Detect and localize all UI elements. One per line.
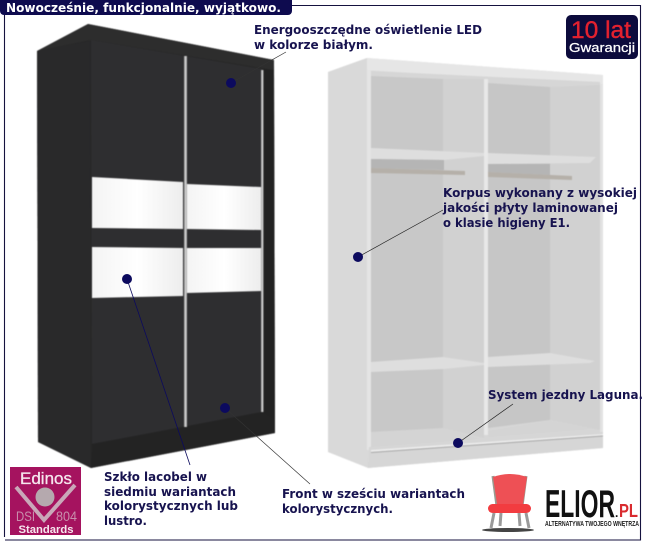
upper shelves and hanging rods bbox=[371, 148, 596, 180]
callout: front bbox=[220, 403, 465, 516]
glass bands bbox=[92, 177, 261, 298]
logo: ELIOR.PL with red chair: PL bbox=[619, 501, 638, 521]
callout: running system bbox=[453, 388, 643, 448]
lower shelves bbox=[371, 353, 595, 372]
logo: Edinos DSI 804 Standards: Edinos bbox=[20, 469, 72, 488]
logo: Edinos DSI 804 Standards: Standards bbox=[18, 524, 74, 536]
callout: running system: System jezdny Laguna. bbox=[488, 388, 643, 402]
callout: LED lighting: Energooszczędne oświetlenie LED bbox=[254, 23, 482, 37]
callout: front: kolorystycznych. bbox=[282, 502, 393, 516]
callout: lacobel glass: lustro. bbox=[104, 514, 147, 528]
callout: lacobel glass: Szkło lacobel w bbox=[104, 470, 207, 484]
logo: ELIOR.PL with red chair bbox=[482, 474, 639, 532]
title banner: Nowocześnie, funkcjonalnie, wyjątkowo. bbox=[6, 0, 281, 15]
callout: carcass bbox=[353, 186, 637, 262]
base and sliding track bbox=[368, 421, 603, 468]
callout: front: Front w sześciu wariantach bbox=[282, 487, 465, 501]
badge: 10 year warranty: Gwarancji bbox=[569, 41, 635, 55]
badge: 10 year warranty bbox=[566, 15, 638, 59]
callout: carcass: Korpus wykonany z wysokiej bbox=[443, 186, 637, 200]
logo: Edinos DSI 804 Standards: DSI bbox=[16, 509, 35, 524]
white wardrobe bbox=[328, 58, 603, 468]
callout: LED lighting bbox=[226, 23, 482, 88]
callout: lacobel glass: siedmiu wariantach bbox=[104, 485, 236, 499]
logo: Edinos DSI 804 Standards: 804 bbox=[56, 509, 77, 524]
callout: LED lighting: w kolorze białym. bbox=[254, 38, 373, 52]
door rails bbox=[184, 56, 264, 427]
logo: Edinos DSI 804 Standards bbox=[10, 467, 81, 536]
icon: red chair bbox=[482, 474, 534, 532]
callout: carcass: o klasie higieny E1. bbox=[443, 216, 570, 230]
logo: ELIOR.PL with red chair: . bbox=[615, 506, 618, 520]
callout: lacobel glass bbox=[104, 274, 238, 528]
badge: 10 year warranty: 10 lat bbox=[571, 17, 631, 44]
callout: lacobel glass: kolorystycznych lub bbox=[104, 499, 238, 513]
black wardrobe bbox=[37, 24, 275, 468]
callout: carcass: jakości płyty laminowanej bbox=[442, 201, 618, 215]
